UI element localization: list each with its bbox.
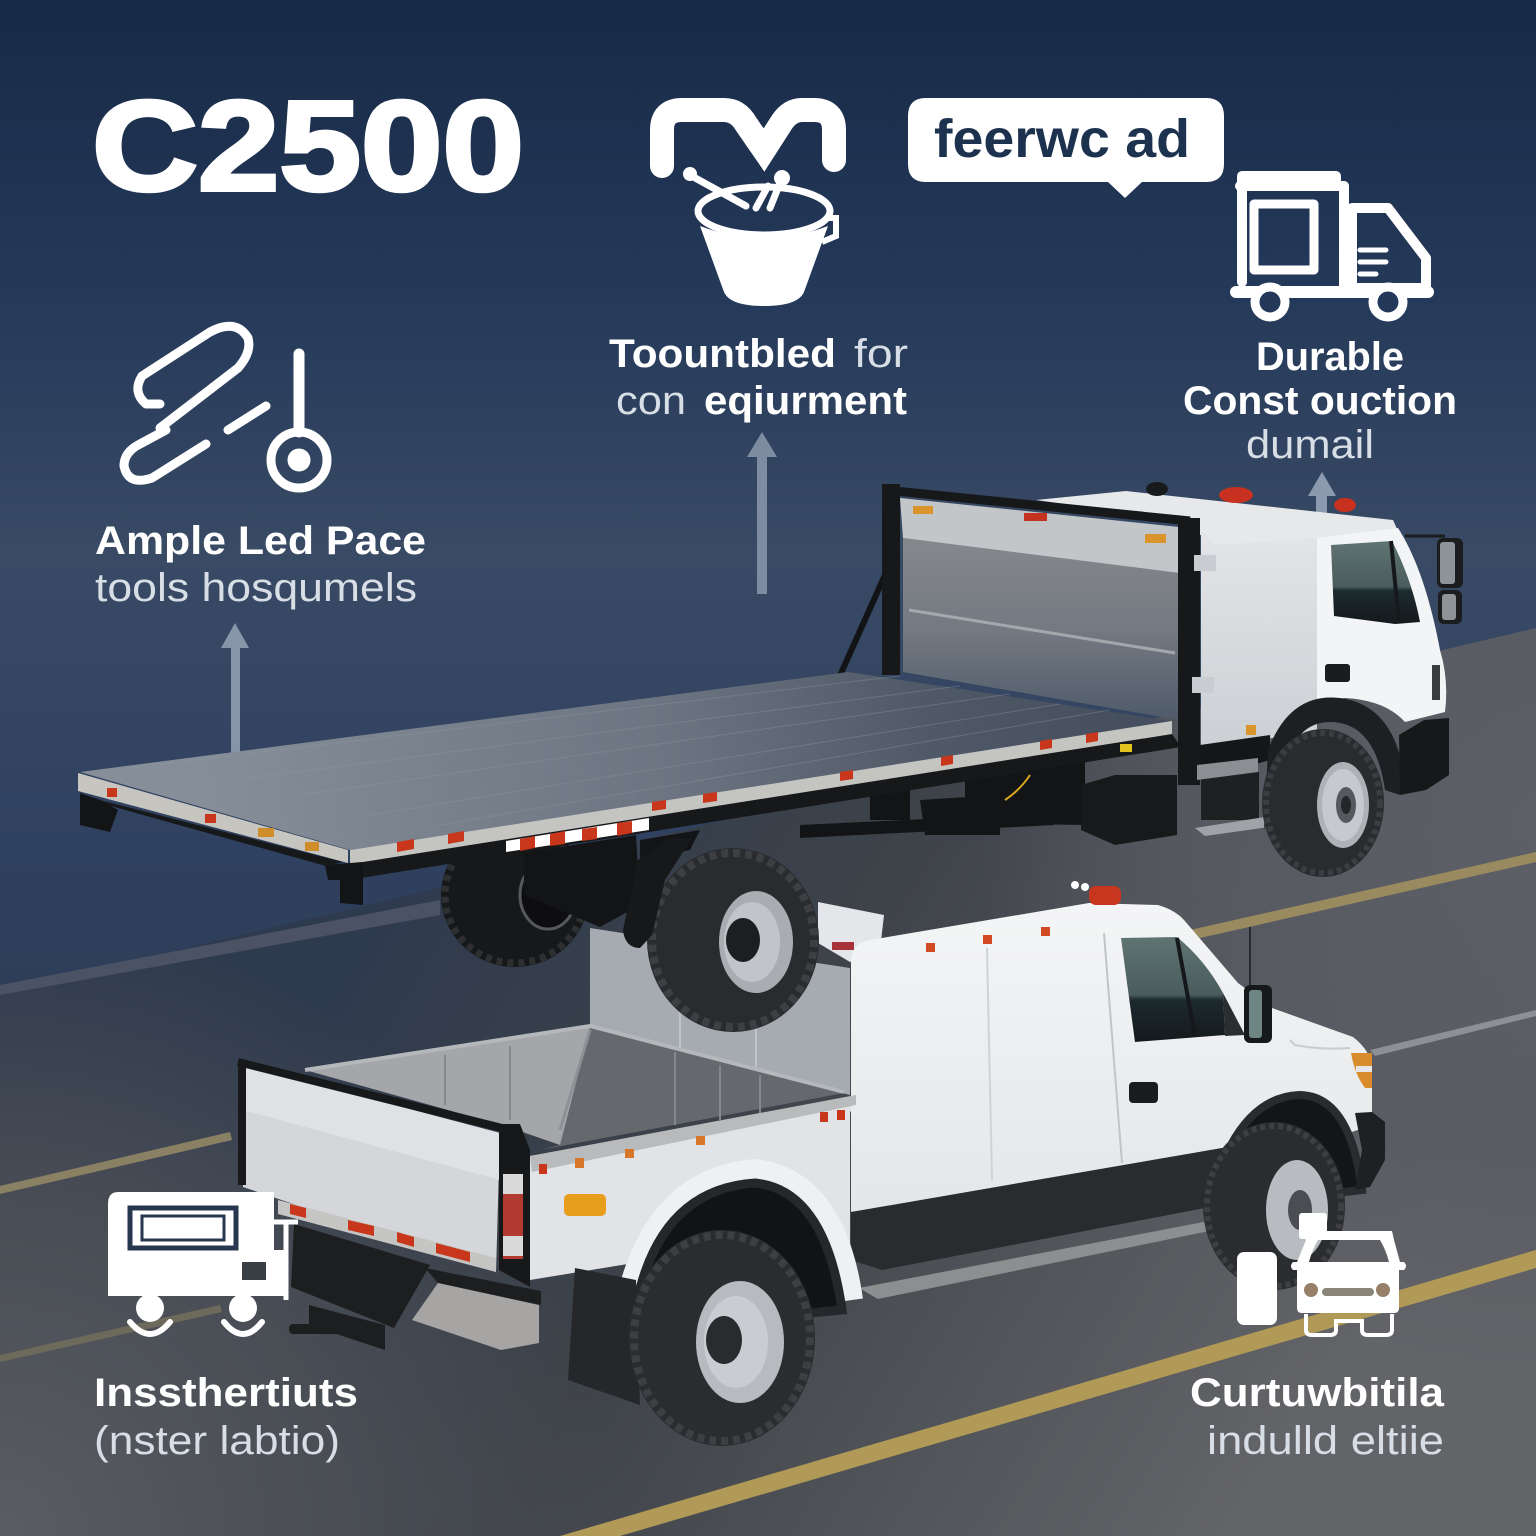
upper bulkhead wall bbox=[590, 928, 850, 1095]
tailgate bbox=[243, 1065, 500, 1272]
text: customizable: indulld eltiie bbox=[1207, 1419, 1444, 1463]
spare tyre and bracket bbox=[623, 838, 819, 1032]
text: toolbed: for bbox=[854, 332, 908, 376]
pickup truck bbox=[238, 881, 1385, 1446]
underbody members bbox=[524, 760, 1085, 927]
arrow: centre bbox=[747, 432, 777, 594]
arrow: right bbox=[1308, 472, 1336, 520]
text: toolbed: Toountbled bbox=[609, 332, 836, 376]
text: durable construction: dumail bbox=[1246, 423, 1374, 467]
deck front frame bbox=[350, 734, 1181, 878]
rear bumper bbox=[289, 1224, 541, 1350]
front fender bbox=[1264, 697, 1405, 830]
ground bbox=[0, 628, 1536, 1536]
rear fender and mudflap bbox=[568, 1170, 852, 1405]
front fender arch bbox=[1208, 1095, 1362, 1208]
icon: hook and key tool bbox=[124, 326, 327, 488]
text: ample load space: tools hosqumels bbox=[95, 566, 417, 610]
icon: utility truck bbox=[108, 1192, 298, 1334]
flatbed truck bbox=[78, 482, 1463, 967]
deck bbox=[80, 672, 1172, 850]
icon: bucket with tools bbox=[662, 110, 836, 306]
bulkhead cap bbox=[818, 902, 884, 962]
callout badge bbox=[908, 98, 1224, 198]
rear wheel bbox=[629, 1230, 815, 1446]
deck end frame bbox=[80, 795, 343, 866]
text: durable construction: Const ouction bbox=[1183, 379, 1457, 423]
cab box and roof bbox=[1036, 482, 1463, 745]
front wheel bbox=[1203, 1122, 1345, 1290]
cab details bbox=[926, 927, 1372, 1180]
text: installation: Inssthertiuts bbox=[94, 1371, 358, 1415]
bed rear post bbox=[499, 1124, 530, 1287]
front wheel bbox=[1262, 729, 1384, 877]
brace bbox=[838, 575, 885, 680]
arrow: left bbox=[221, 623, 249, 755]
text: toolbed: eqiurment bbox=[704, 379, 907, 423]
bed markers bbox=[539, 1110, 845, 1216]
text: ample load space bbox=[95, 519, 426, 610]
text: installation bbox=[94, 1371, 358, 1463]
bumper bbox=[1399, 718, 1449, 795]
deck front rail bbox=[350, 721, 1172, 864]
rear hitches bbox=[80, 793, 363, 905]
chassis under cab bbox=[1081, 735, 1284, 845]
bed interior bbox=[305, 1028, 590, 1145]
tailgate top rail bbox=[238, 1062, 510, 1130]
cab body bbox=[851, 903, 1372, 1212]
rail markers bbox=[107, 732, 1132, 852]
bed side bbox=[530, 1098, 856, 1280]
callout badge: feerwc ad bbox=[934, 109, 1190, 169]
deck end rail bbox=[78, 773, 348, 863]
text: customizable: Curtuwbitila bbox=[1190, 1371, 1445, 1415]
roof beacon bbox=[1071, 881, 1121, 905]
title: C2500 bbox=[92, 75, 524, 218]
lower trim bbox=[851, 1147, 1228, 1270]
reflective stripe bbox=[506, 818, 649, 852]
bulkhead white band bbox=[900, 498, 1179, 573]
text: toolbed bbox=[609, 332, 908, 423]
bulkhead panel bbox=[903, 538, 1179, 720]
text: customizable bbox=[1190, 1371, 1445, 1463]
chrome bumper bbox=[412, 1283, 539, 1350]
side step bbox=[859, 1219, 1219, 1299]
rear wheel behind deck bbox=[441, 823, 589, 967]
black rack bbox=[885, 484, 1216, 785]
text: durable construction: Durable bbox=[1256, 335, 1404, 379]
front bumper bbox=[1355, 1112, 1385, 1190]
text: installation: (nster labtio) bbox=[94, 1419, 340, 1463]
text: toolbed: con bbox=[616, 379, 686, 423]
icon: car front bbox=[1237, 1213, 1406, 1335]
text: ample load space: Ample Led Pace bbox=[95, 519, 426, 563]
icon: delivery truck bbox=[1236, 176, 1428, 317]
tailgate reflector strip bbox=[278, 1200, 496, 1272]
text: durable construction bbox=[1183, 335, 1457, 467]
